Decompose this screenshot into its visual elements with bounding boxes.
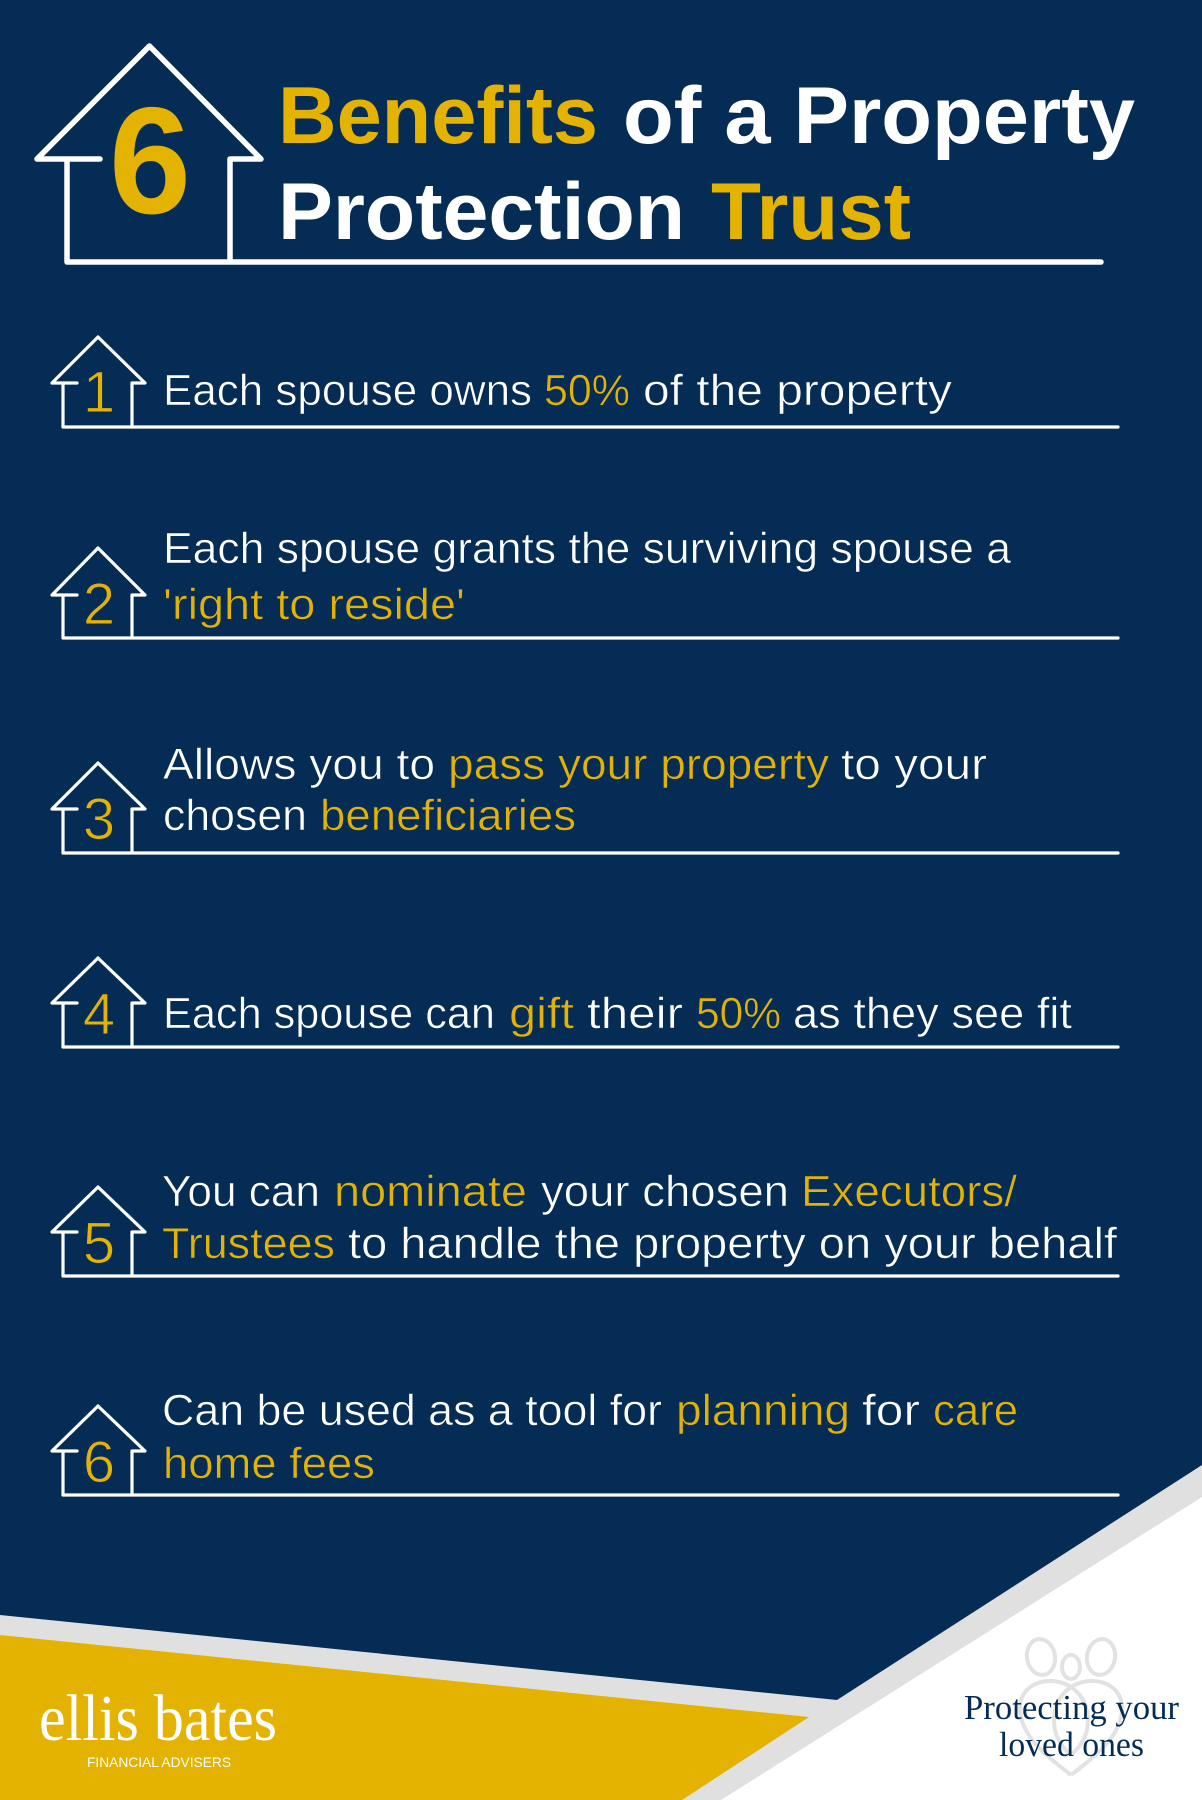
icon: house 4 bbox=[52, 958, 1118, 1047]
benefit 4 text: gift bbox=[509, 989, 574, 1038]
benefit 4 text bbox=[163, 989, 1072, 1038]
number 1: 1 bbox=[83, 360, 115, 425]
benefit 6 text: care bbox=[933, 1386, 1018, 1435]
benefit 6 text: Can be used as a tool for bbox=[162, 1386, 662, 1435]
benefit 5 text bbox=[162, 1167, 1118, 1268]
benefit 2 text: 'right to reside' bbox=[163, 580, 465, 629]
heading: Trust bbox=[711, 167, 911, 257]
icon: large house outline with rule bbox=[37, 46, 1101, 262]
benefit 2 text: Each spouse grants the surviving spouse a bbox=[163, 524, 1012, 573]
benefit 4 text: 50% bbox=[696, 989, 781, 1038]
benefit 3 text: beneficiaries bbox=[320, 791, 576, 840]
benefit 5 text: your chosen bbox=[541, 1167, 789, 1216]
benefit 6 text: home fees bbox=[163, 1439, 375, 1488]
number 6: 6 bbox=[83, 1430, 115, 1495]
number 3: 3 bbox=[83, 787, 115, 852]
benefit 4 text: their bbox=[587, 989, 683, 1038]
tagline: Protecting your bbox=[964, 1688, 1179, 1727]
icon: house 1 bbox=[52, 337, 1118, 427]
benefit 5 text: nominate bbox=[334, 1167, 527, 1216]
benefit 6 text bbox=[162, 1386, 1018, 1488]
benefit 1 text: Each spouse owns bbox=[163, 366, 532, 415]
number 2: 2 bbox=[83, 572, 115, 637]
benefit 5 text: Executors/ bbox=[801, 1167, 1018, 1216]
benefit 6 bbox=[52, 1386, 1118, 1495]
benefit 2 bbox=[52, 524, 1118, 638]
logo: ellis bates: FINANCIAL ADVISERS bbox=[87, 1754, 231, 1770]
benefit 6 text: for bbox=[862, 1386, 920, 1435]
heading: Benefits bbox=[278, 71, 598, 161]
benefit 4 text: Each spouse can bbox=[163, 989, 495, 1038]
benefit 4 bbox=[52, 958, 1118, 1047]
tagline bbox=[964, 1688, 1179, 1764]
footer grey band bbox=[0, 1465, 1202, 1800]
benefit 4 text: as they see fit bbox=[793, 989, 1072, 1038]
benefit 3 text bbox=[163, 740, 987, 840]
footer yellow panel bbox=[0, 1635, 809, 1800]
icon: house 2 bbox=[52, 548, 1118, 638]
heading bbox=[278, 71, 1135, 257]
icon: house 6 bbox=[52, 1406, 1118, 1495]
benefit 5 bbox=[52, 1167, 1118, 1276]
benefit 5 text: Trustees bbox=[162, 1219, 335, 1268]
benefit 1 text: of the property bbox=[643, 366, 952, 415]
icon: family heart bbox=[1020, 1637, 1122, 1775]
heading: Protection bbox=[278, 167, 685, 257]
title block bbox=[37, 46, 1135, 262]
icon: house 5 bbox=[52, 1187, 1118, 1276]
icon: house 3 bbox=[52, 763, 1118, 853]
benefit 1 bbox=[52, 337, 1118, 427]
benefit 2 text bbox=[163, 524, 1012, 629]
large number 6: 6 bbox=[109, 76, 191, 246]
benefit 3 text: to your bbox=[841, 740, 987, 789]
benefit 1 text: 50% bbox=[544, 366, 630, 415]
benefit 3 text: pass your property bbox=[448, 740, 829, 789]
footer white panel bbox=[721, 1497, 1202, 1800]
logo: ellis bates: ellis bates bbox=[39, 1682, 277, 1755]
heading: of a Property bbox=[623, 71, 1135, 161]
benefit 6 text: planning bbox=[676, 1386, 850, 1435]
number 4: 4 bbox=[83, 982, 115, 1047]
number 5: 5 bbox=[83, 1211, 115, 1276]
tagline: loved ones bbox=[999, 1725, 1144, 1764]
benefit 5 text: You can bbox=[162, 1167, 320, 1216]
benefit 3 bbox=[52, 740, 1118, 853]
benefit 3 text: Allows you to bbox=[163, 740, 435, 789]
benefit 5 text: to handle the property on your behalf bbox=[348, 1219, 1118, 1268]
benefit 3 text: chosen bbox=[163, 791, 307, 840]
benefit 1 text bbox=[163, 366, 952, 415]
